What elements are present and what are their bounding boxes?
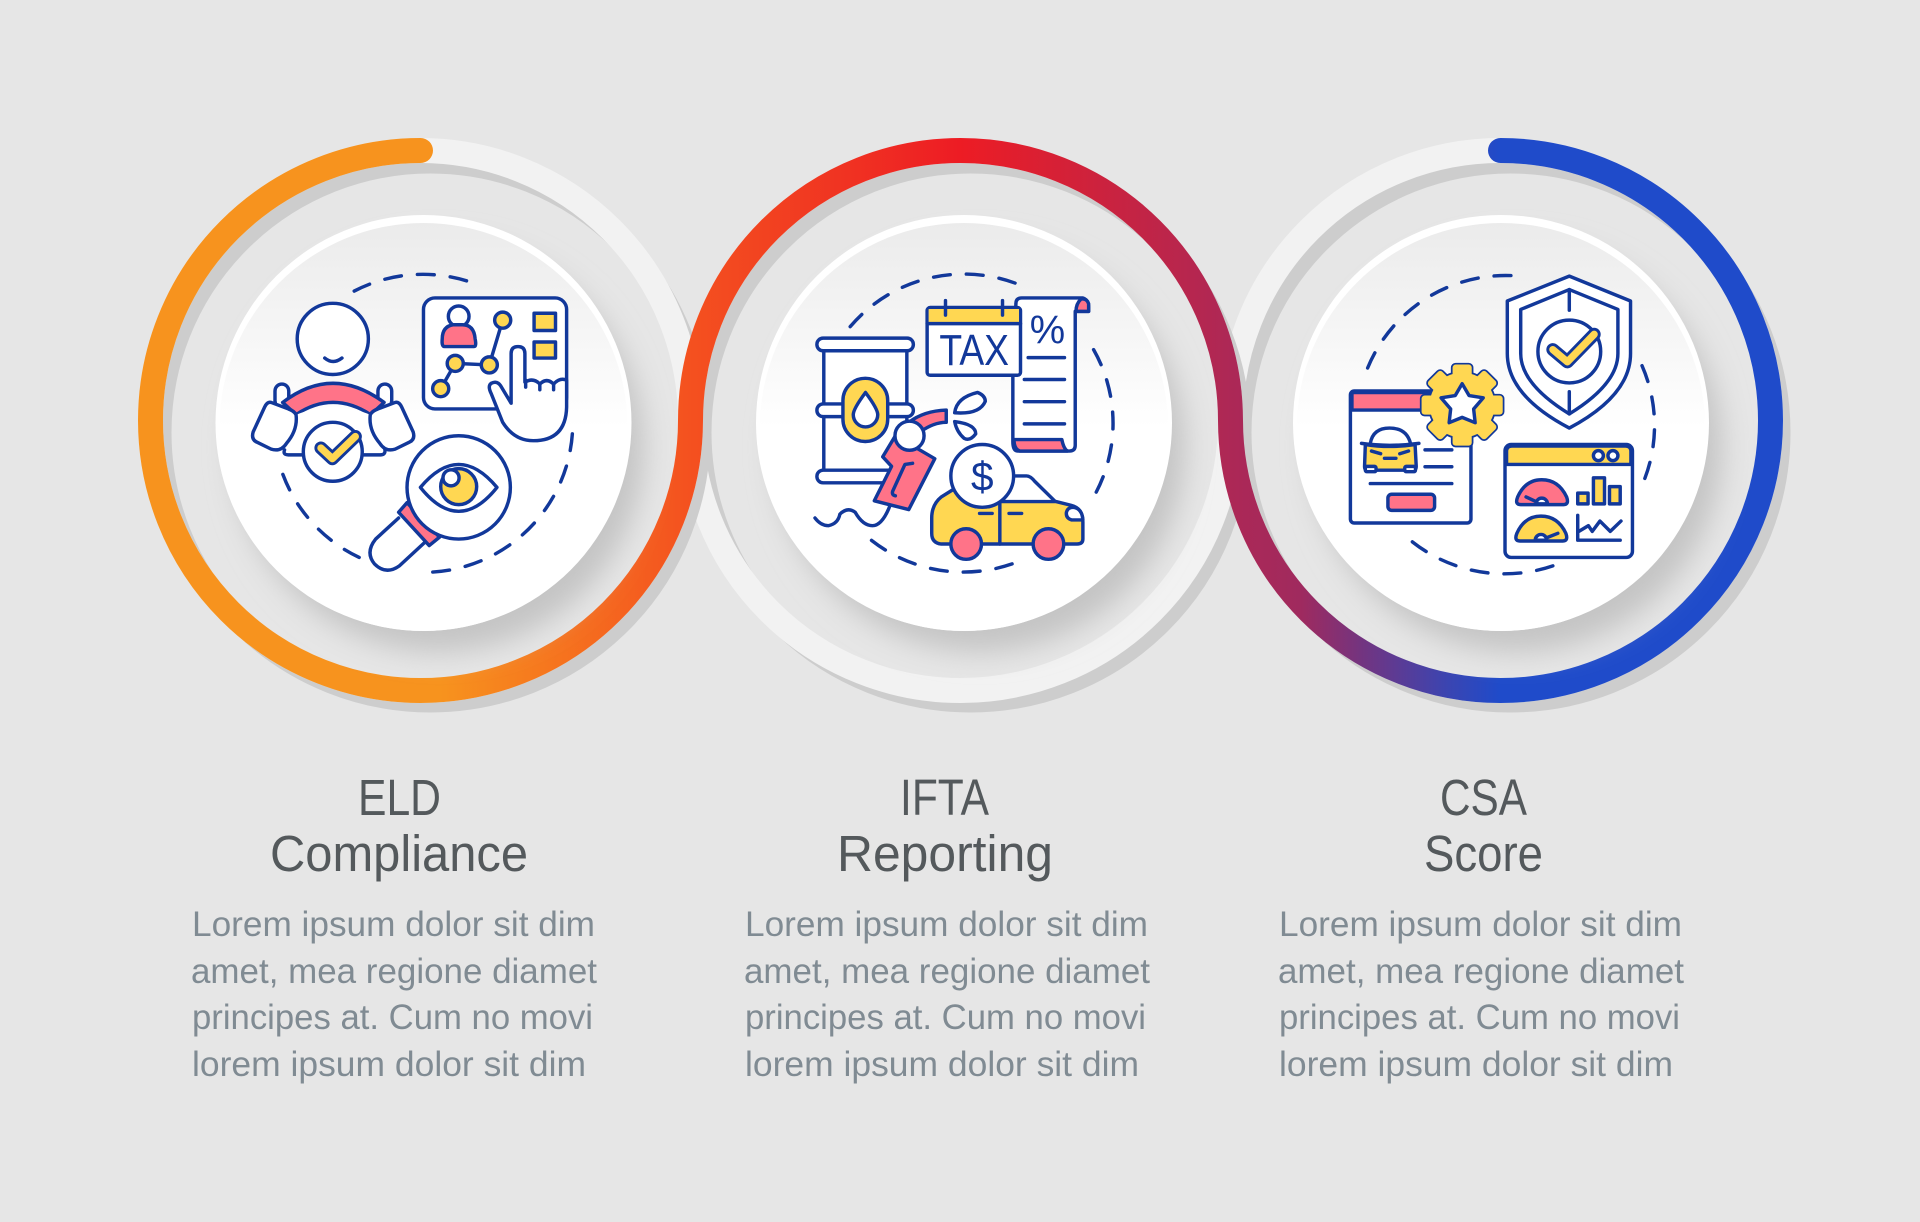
icon: IFTA reporting xyxy=(815,274,1113,572)
text block: CSA description: principes at. Cum no movi xyxy=(1279,998,1680,1037)
icon part: tax receipt xyxy=(1013,298,1089,451)
ring track: IFTA xyxy=(690,150,1240,702)
text block: ELD description xyxy=(191,905,597,1084)
heading: IFTA Reporting: Reporting xyxy=(837,825,1053,882)
heading: CSA Score: CSA xyxy=(1440,769,1527,826)
text block: ELD description: amet, mea regione diamet xyxy=(191,952,597,991)
icon part: magnifier with eye xyxy=(370,436,510,570)
disc: CSA xyxy=(1293,215,1722,652)
icon part: vehicle document xyxy=(1350,391,1471,523)
text block: ELD description: principes at. Cum no movi xyxy=(192,998,593,1037)
heading: ELD Compliance xyxy=(270,769,528,882)
ring track: ELD xyxy=(150,150,700,702)
heading: IFTA Reporting xyxy=(837,769,1053,882)
icon part: tax receipt: % xyxy=(1030,308,1065,352)
text block: CSA description: Lorem ipsum dolor sit dim xyxy=(1279,905,1682,944)
disc: ELD xyxy=(216,215,644,652)
heading: IFTA Reporting: IFTA xyxy=(900,769,989,826)
icon part: steering wheel and hands xyxy=(253,383,414,481)
text block: IFTA description: Lorem ipsum dolor sit dim xyxy=(745,905,1148,944)
text block: CSA description: lorem ipsum dolor sit dim xyxy=(1279,1045,1673,1084)
icon part: fuel nozzle and hose xyxy=(815,392,985,526)
text block: IFTA description: amet, mea regione diamet xyxy=(744,952,1150,991)
icon: CSA score xyxy=(1350,275,1655,574)
icon part: route screen and pointing hand xyxy=(423,298,567,441)
heading: CSA Score xyxy=(1424,769,1543,882)
heading: CSA Score: Score xyxy=(1424,825,1543,882)
text block: IFTA description xyxy=(744,905,1150,1084)
icon part: car with dollar badge xyxy=(932,445,1083,559)
text block: CSA description xyxy=(1278,905,1684,1084)
icon part: car with dollar badge: $ xyxy=(971,453,994,499)
text block: ELD description: Lorem ipsum dolor sit dim xyxy=(192,905,595,944)
ring track: CSA xyxy=(1230,150,1780,702)
heading: ELD Compliance: ELD xyxy=(358,769,441,826)
icon part: shield with check xyxy=(1507,276,1631,428)
text block: IFTA description: principes at. Cum no movi xyxy=(745,998,1146,1037)
icon part: dashboard window xyxy=(1505,445,1632,557)
icon part: driver head xyxy=(297,303,368,374)
icon part: gear with star xyxy=(1422,365,1503,446)
icon: ELD compliance xyxy=(253,274,572,572)
gradient flow line connecting the three rings xyxy=(150,150,1770,690)
disc: IFTA xyxy=(756,215,1185,652)
text block: ELD description: lorem ipsum dolor sit dim xyxy=(192,1045,586,1084)
icon part: oil barrel xyxy=(817,338,913,483)
icon part: tax calendar: TAX xyxy=(939,327,1009,375)
text block: IFTA description: lorem ipsum dolor sit dim xyxy=(745,1045,1139,1084)
text block: CSA description: amet, mea regione diamet xyxy=(1278,952,1684,991)
heading: ELD Compliance: Compliance xyxy=(270,825,528,882)
icon part: tax calendar xyxy=(927,301,1021,375)
